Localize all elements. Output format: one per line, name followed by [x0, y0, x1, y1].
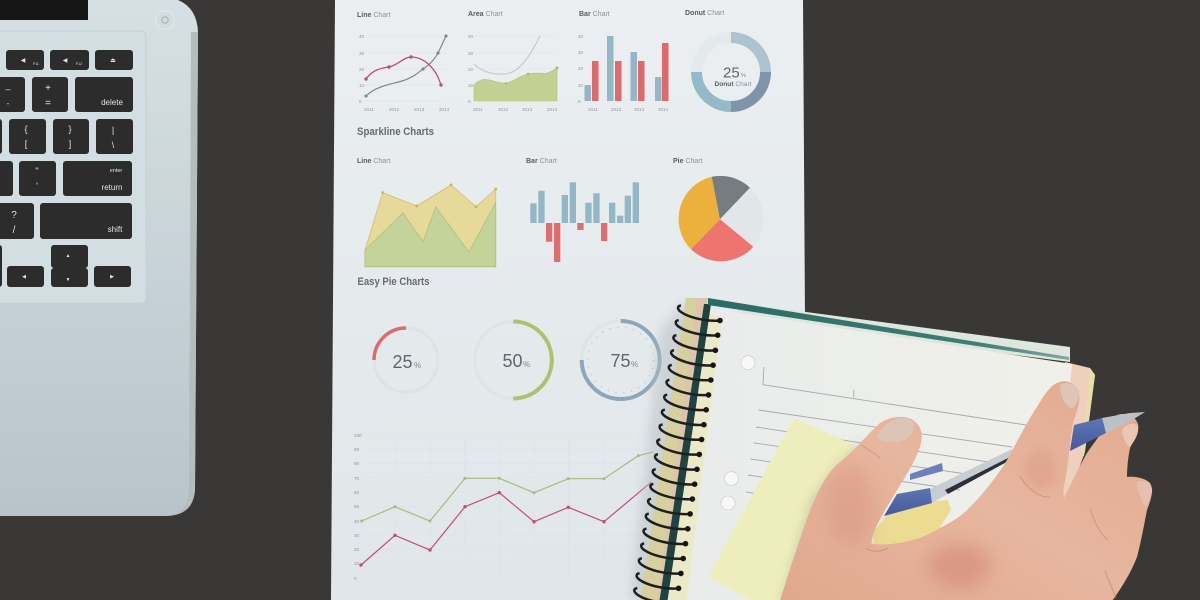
- finger nail: index: [1122, 424, 1138, 447]
- key labels: ◀: [22, 274, 26, 280]
- hand shadow: [779, 440, 880, 600]
- panel: area chart: [468, 11, 559, 112]
- key labels: F12: [76, 62, 82, 66]
- pink back sheet: [1060, 362, 1095, 520]
- panel: bar chart: 10: [578, 83, 584, 88]
- panel: area chart: 0: [468, 99, 471, 104]
- sticky note lower patch: [873, 500, 951, 549]
- key labels: F11: [33, 62, 39, 66]
- sticky note: [708, 418, 856, 600]
- power button: [156, 11, 174, 29]
- label: Area Chart: [468, 11, 503, 18]
- spiral binding: [634, 306, 723, 600]
- y axis labels: 30: [354, 533, 360, 538]
- gray series: [474, 36, 540, 74]
- red series: [359, 482, 652, 567]
- pen clip: [910, 463, 943, 480]
- hand: [779, 381, 1152, 600]
- key labels: =: [45, 98, 51, 109]
- key labels: ◀: [63, 58, 68, 64]
- key labels: ': [36, 181, 38, 191]
- y axis labels: 70: [354, 476, 360, 481]
- panel: bar chart: 2013: [634, 107, 645, 112]
- label: Line Chart: [357, 158, 391, 165]
- red bars: [592, 43, 668, 101]
- key labels: \: [112, 140, 115, 150]
- key labels: ◀: [21, 58, 26, 64]
- heading: sparkline charts: Sparkline Charts: [357, 126, 434, 138]
- panel: top line chart: 2012: [389, 107, 400, 112]
- laptop: [0, 0, 198, 516]
- ruled lines: [746, 367, 1026, 499]
- keyboard recess: [0, 31, 146, 303]
- metal tip: [1102, 412, 1145, 433]
- panel: area chart: 2011: [473, 107, 483, 112]
- panel: bar chart: 2014: [658, 107, 669, 112]
- label: Line Chart: [357, 12, 391, 19]
- keys: [0, 50, 133, 287]
- lower grip: [884, 488, 932, 516]
- panel: area chart: 2014: [547, 107, 558, 112]
- y axis labels: 60: [354, 490, 360, 495]
- easy pie: 50 percent: 50: [502, 351, 523, 371]
- panel: top line chart: [357, 12, 450, 112]
- panel: bar chart: 0: [578, 99, 581, 104]
- key labels: ": [35, 166, 39, 176]
- easy pie: 50 percent: [475, 322, 552, 398]
- notebook shadow: [630, 300, 700, 600]
- panel: bar chart: 20: [578, 66, 584, 71]
- donut ring: [696, 38, 766, 106]
- key labels: ?: [11, 210, 17, 221]
- display hinge: [0, 0, 88, 20]
- key labels: -: [7, 99, 10, 108]
- donut value: 25: [723, 64, 740, 82]
- finger nail: ring: [1137, 481, 1152, 506]
- panel: area chart: 2012: [498, 107, 509, 112]
- red slice: [691, 219, 753, 261]
- panel: donut chart: Donut Chart: [714, 81, 752, 88]
- finger nail: middle: [1060, 383, 1079, 408]
- spine: [659, 304, 711, 600]
- easy pie: 25 percent: [374, 328, 438, 392]
- panel: top line chart: 2011: [364, 107, 374, 112]
- key labels: ]: [69, 139, 71, 149]
- green area: [365, 203, 496, 267]
- panel: bar chart: 40: [578, 34, 584, 39]
- easy pie: 75 percent: [582, 321, 660, 399]
- y axis labels: 10: [354, 561, 360, 566]
- panel: donut chart: %: [741, 73, 746, 79]
- negative bars: [546, 223, 607, 262]
- y axis labels: 90: [354, 447, 360, 452]
- panel: top line chart: 2013: [414, 107, 425, 112]
- yellow slice: [679, 177, 720, 249]
- panel: area chart: 20: [468, 67, 474, 72]
- label: Bar Chart: [579, 11, 610, 18]
- pale back sheet: [738, 303, 1070, 362]
- key labels: ▶: [110, 274, 114, 280]
- panel: top line chart: 30: [359, 51, 365, 56]
- notebook: [630, 298, 1095, 600]
- key labels: [: [25, 139, 28, 149]
- panel: donut chart: [685, 10, 766, 106]
- left cover strip: [640, 298, 708, 600]
- panel: top line chart: 20: [359, 67, 365, 72]
- panel: bar chart: [578, 11, 669, 112]
- label: Pie Chart: [673, 158, 703, 165]
- gray slice: [712, 176, 750, 219]
- key labels: enter: [110, 168, 122, 174]
- key labels: }: [68, 124, 72, 134]
- y axis labels: 100: [354, 433, 362, 438]
- light slice: [720, 188, 763, 247]
- key labels: return: [102, 183, 122, 192]
- key labels: delete: [101, 98, 123, 107]
- easy pie: 50 percent: %: [523, 360, 530, 369]
- perforated strip: [664, 313, 722, 600]
- panel: large line chart: [354, 433, 660, 581]
- label: Donut Chart: [685, 10, 724, 17]
- easy pie: 75 percent: %: [631, 360, 638, 369]
- key labels: ⏏: [110, 58, 116, 64]
- key labels: [5, 58, 123, 283]
- hand silhouette: [779, 381, 1152, 600]
- key labels: ▲: [66, 253, 70, 259]
- y axis labels: 80: [354, 461, 360, 466]
- blue bars: [584, 36, 662, 101]
- panel: sparkline area chart: [357, 158, 497, 267]
- label: Bar Chart: [526, 158, 557, 165]
- creases: [861, 445, 1116, 598]
- thumbnail: [877, 418, 914, 442]
- white page: [684, 308, 1072, 600]
- easy pie: 75 percent: 75: [610, 351, 631, 371]
- clear barrel: [930, 449, 1014, 503]
- y axis labels: 0: [354, 576, 357, 581]
- laptop edge strip: [178, 32, 198, 514]
- pen barrel: [884, 449, 1014, 516]
- pen tip and grip: [1070, 412, 1145, 451]
- green series: [360, 452, 653, 522]
- key labels: ▼: [66, 277, 70, 283]
- key labels: {: [24, 124, 28, 134]
- panel: top line chart: 0: [359, 99, 362, 104]
- heading: easy pie charts: Easy Pie Charts: [358, 276, 430, 288]
- key labels: +: [45, 83, 51, 94]
- easy pie: 25 percent: 25: [392, 352, 413, 372]
- panel: sparkline bar chart: [526, 158, 639, 262]
- panel: bar chart: 2012: [611, 107, 622, 112]
- panel: pie chart: [673, 158, 763, 261]
- yellow area: [365, 185, 496, 267]
- key labels: |: [112, 125, 114, 135]
- panel: area chart: 30: [468, 51, 474, 56]
- green area: [474, 68, 557, 101]
- panel: area chart: 2013: [522, 107, 533, 112]
- gray series: [366, 36, 446, 96]
- positive bars: [530, 182, 639, 223]
- paper sheet: [331, 0, 805, 600]
- laptop body: [0, 0, 198, 516]
- paper report: [331, 0, 805, 600]
- teal cover band: [708, 298, 1069, 360]
- panel: area chart: 40: [468, 34, 474, 39]
- y axis labels: [354, 433, 362, 581]
- panel: bar chart: 2011: [588, 107, 598, 112]
- y axis labels: 50: [354, 504, 360, 509]
- y axis labels: 20: [354, 547, 360, 552]
- key labels: shift: [108, 225, 123, 234]
- panel: top line chart: 2014: [439, 107, 450, 112]
- y axis labels: 40: [354, 519, 360, 524]
- blue grip: [1070, 418, 1106, 451]
- easy pie: 25 percent: %: [414, 361, 421, 370]
- panel: top line chart: 10: [359, 83, 365, 88]
- knuckle redness: [928, 544, 992, 588]
- panel: top line chart: 40: [359, 34, 365, 39]
- panel: bar chart: 30: [578, 50, 584, 55]
- panel: area chart: 10: [468, 83, 474, 88]
- punched holes: [721, 356, 755, 510]
- key labels: –: [5, 84, 11, 94]
- red series: [366, 57, 441, 85]
- key labels: /: [13, 225, 16, 236]
